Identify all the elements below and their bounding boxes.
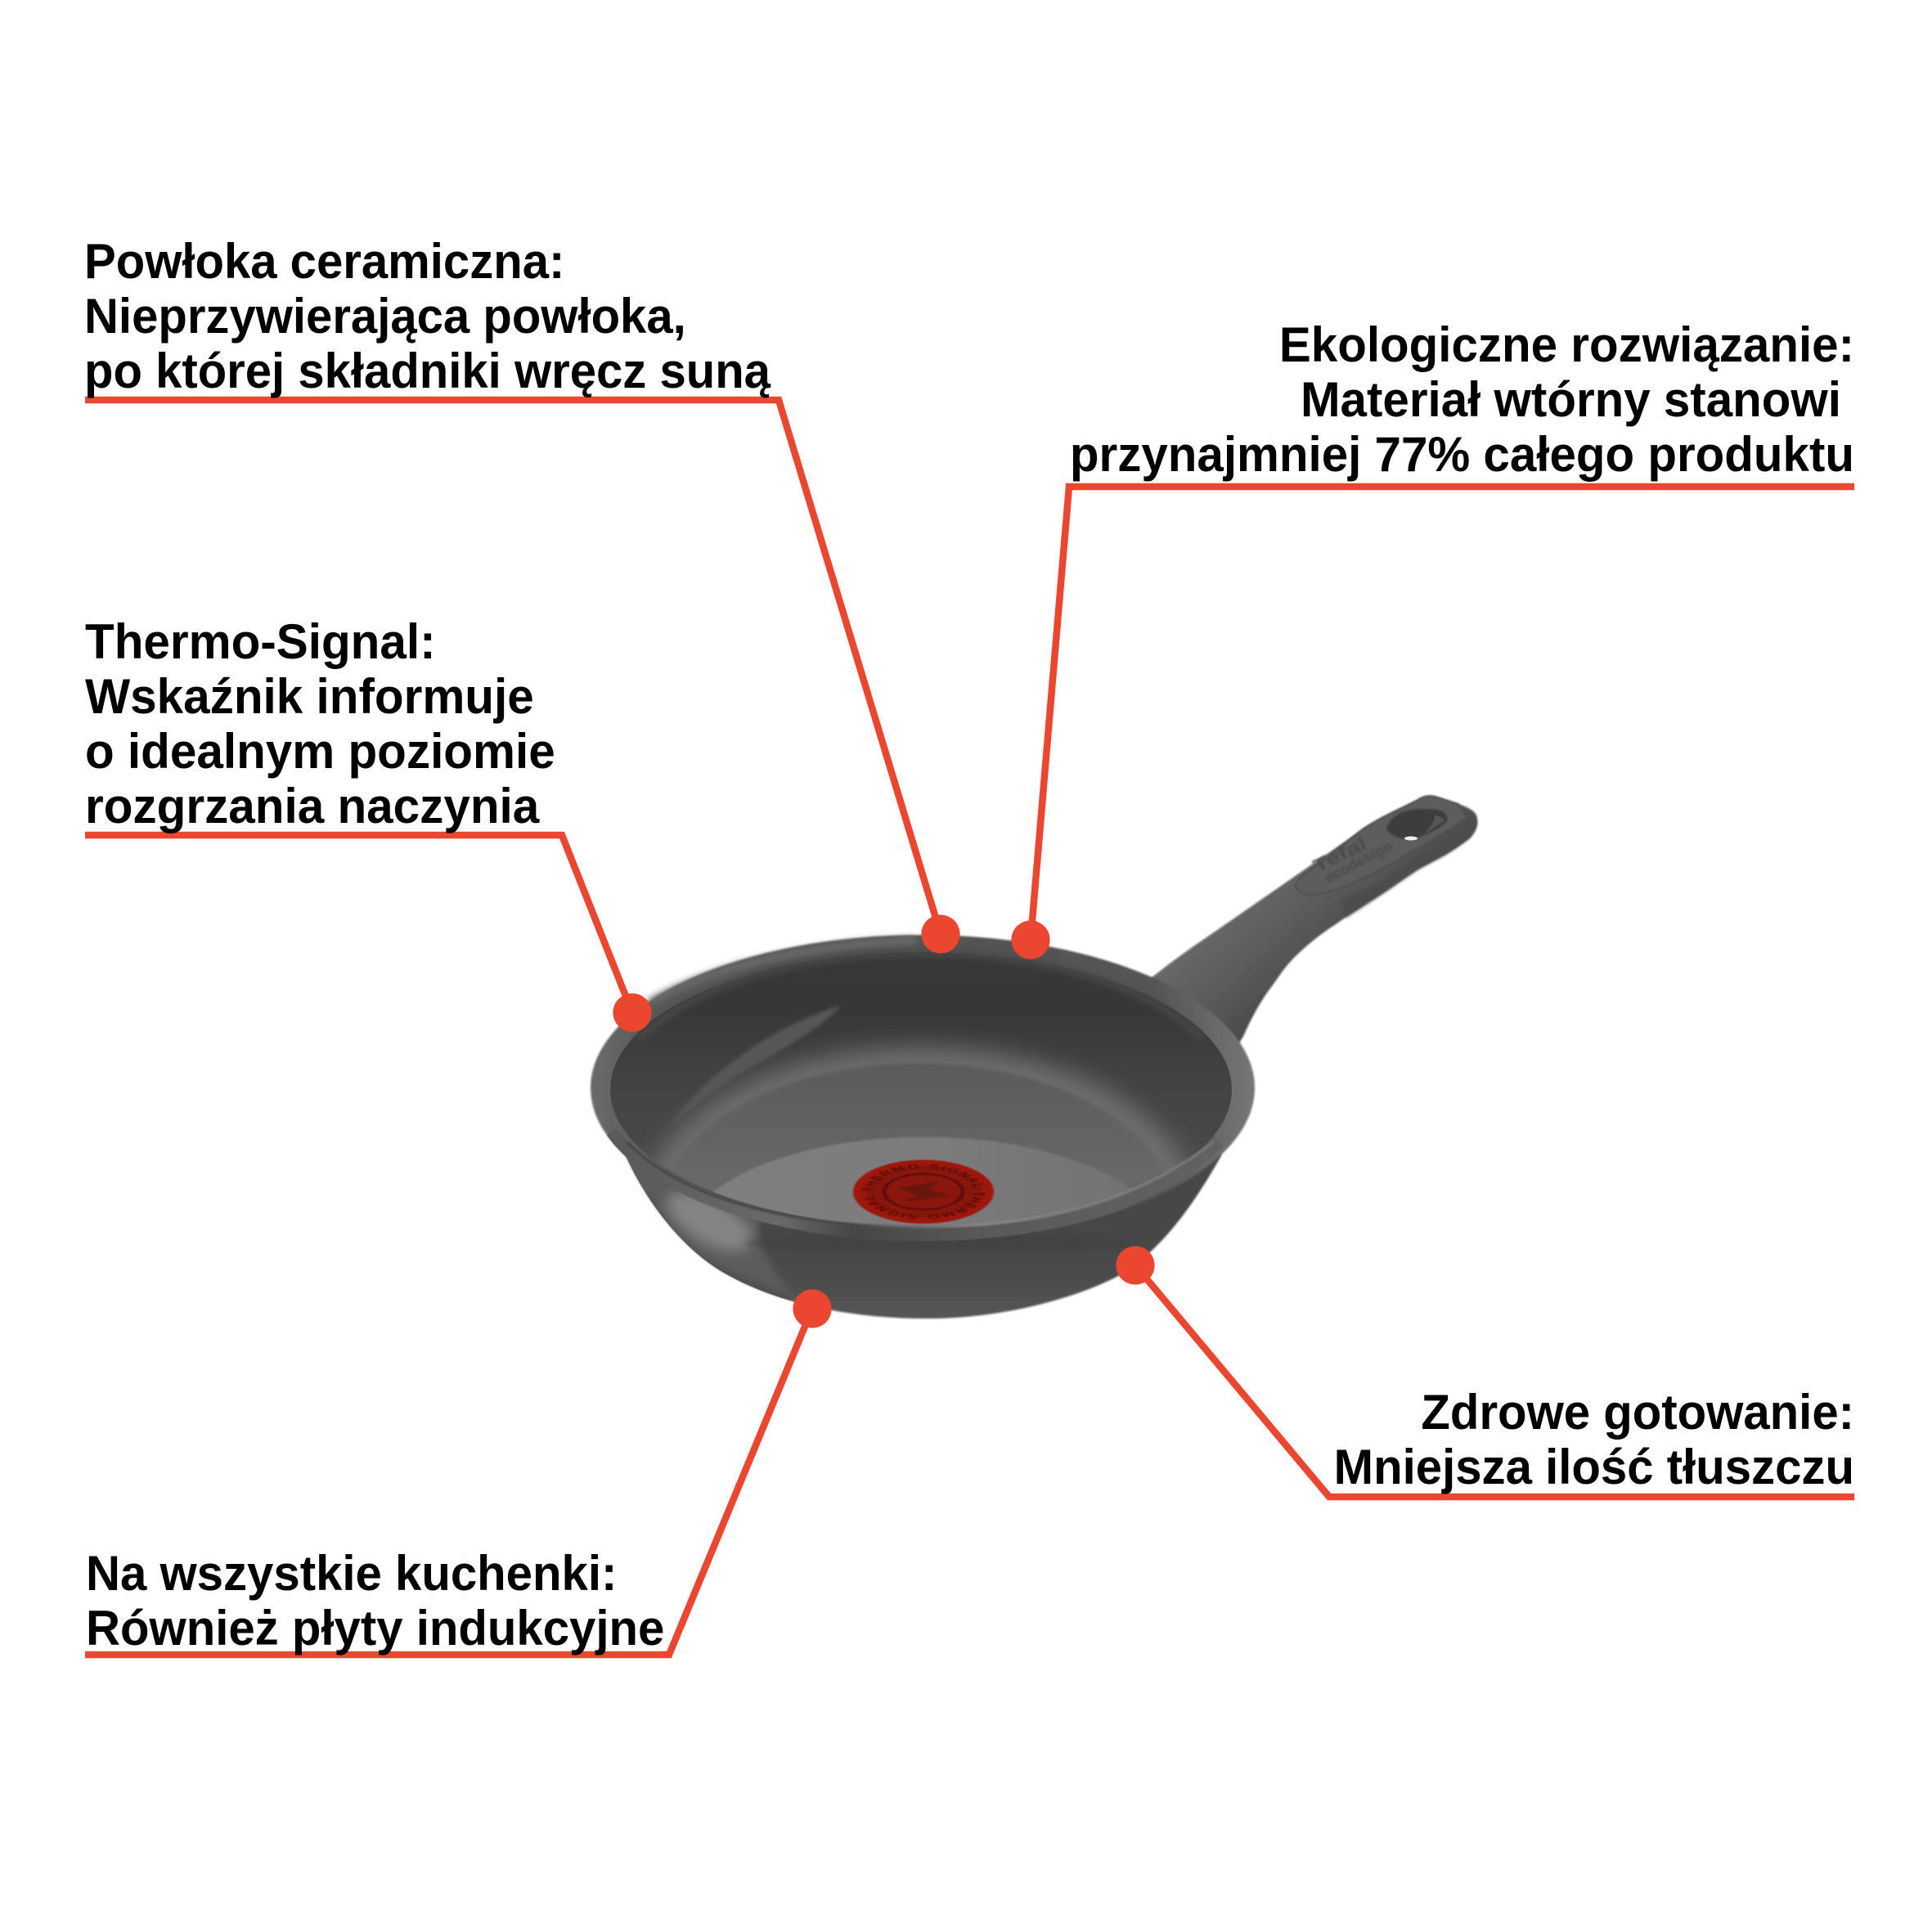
text block: Ekologiczne rozwiązanie: przynajmniej 77% całego produktu [1070, 426, 1854, 482]
text block: Powłoka ceramiczna: po której składniki wręcz suną [84, 344, 771, 398]
text block: Powłoka ceramiczna: Nieprzywierająca powłoka, [84, 289, 686, 344]
text block: Ekologiczne rozwiązanie: Ekologiczne rozwiązanie: [1279, 317, 1854, 372]
marker dot: all hobs [793, 1289, 832, 1328]
handle logo text: ecodesign [1322, 838, 1395, 887]
soft upper inner rim edge [638, 953, 1202, 1039]
text block: Thermo-Signal: Wskaźnik informuje [85, 668, 534, 724]
rim front lip [609, 1133, 1219, 1234]
interior highlight streak [681, 1006, 839, 1114]
pan illustration [589, 793, 1479, 1407]
pan rim [591, 935, 1255, 1241]
text block: Thermo-Signal [85, 613, 555, 833]
handle end plate [1296, 796, 1467, 895]
text block: Powłoka ceramiczna: Powłoka ceramiczna: [84, 234, 564, 289]
callout line: Powłoka ceramiczna [85, 400, 941, 934]
handle hanging hole [1386, 809, 1447, 839]
text block: Thermo-Signal: o idealnym poziomie [85, 723, 555, 779]
text block: Zdrowe gotowanie: Mniejsza ilość tłuszczu [1334, 1440, 1854, 1494]
text block: Ekologiczne rozwiązanie: Materiał wtórny stanowi [1301, 371, 1841, 427]
interior ridge [682, 1063, 1157, 1165]
interior wall glow [650, 1036, 1189, 1172]
callout line: Thermo-Signal [85, 835, 632, 1013]
text block: Na wszystkie kuchenki: Również płyty indukcyjne [86, 1601, 664, 1656]
callout line: Na wszystkie kuchenki [85, 1309, 812, 1655]
text block: Na wszystkie kuchenki: Na wszystkie kuchenki: [86, 1546, 617, 1601]
pan floor [713, 1137, 1129, 1225]
pan body [625, 1153, 1222, 1320]
body left highlight [627, 1157, 795, 1302]
text block: Thermo-Signal: rozgrzania naczynia [85, 778, 540, 833]
marker dot: ecological [1011, 920, 1050, 959]
thermo-signal spot: THERMO SIGNAL THERMO SIGNAL [861, 1164, 986, 1220]
callout line: Zdrowe gotowanie [1135, 1265, 1854, 1497]
pan handle [1141, 796, 1478, 1063]
text block: Ekologiczne rozwiązanie [1070, 317, 1854, 482]
text block: Thermo-Signal: Thermo-Signal: [85, 613, 436, 669]
text block: Na wszystkie kuchenki [86, 1546, 664, 1656]
marker dot: coating [921, 914, 960, 954]
pan interior [610, 952, 1232, 1227]
callout line: Ekologiczne rozwiązanie [1031, 487, 1854, 940]
text block: Zdrowe gotowanie [1334, 1385, 1854, 1494]
handle logo text: Tefal [1310, 833, 1370, 876]
marker dot: thermo-signal [613, 993, 652, 1032]
text block: Powłoka ceramiczna [84, 234, 771, 398]
text block: Zdrowe gotowanie: Zdrowe gotowanie: [1421, 1385, 1854, 1440]
marker dot: healthy cooking [1116, 1246, 1155, 1285]
rim inner edge line [627, 1141, 1215, 1227]
